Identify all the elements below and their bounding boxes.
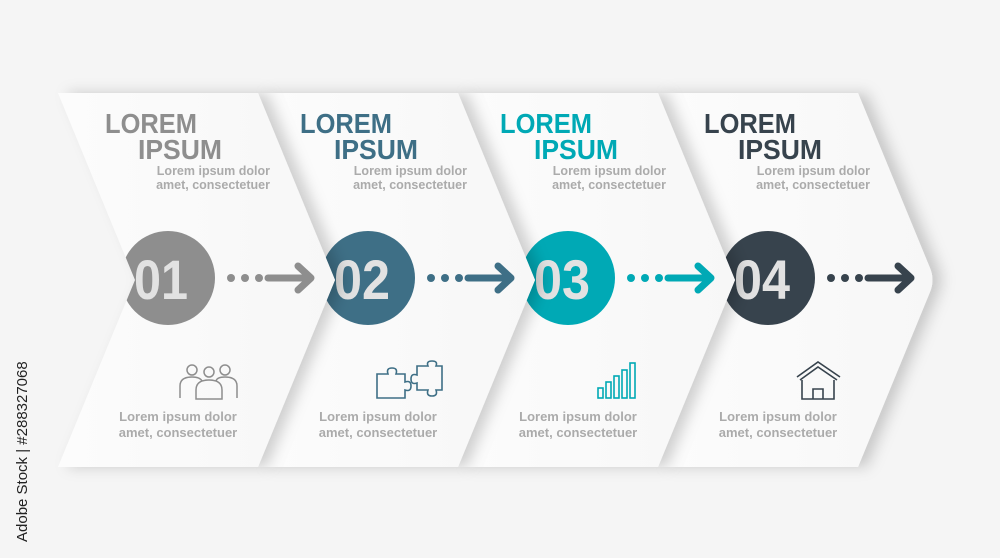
bottom text blocks	[119, 409, 837, 440]
circle 02: 02	[334, 248, 390, 311]
circle 04	[721, 231, 815, 325]
chevron 4	[658, 93, 932, 467]
chevron 1	[58, 93, 335, 467]
bottom text blocks: Lorem ipsum dolor	[719, 409, 837, 424]
top text blocks: Lorem ipsum dolor	[757, 164, 870, 178]
title 1: IPSUM	[138, 134, 222, 165]
circle 04: 04	[734, 248, 790, 311]
top text blocks: amet, consectetuer	[756, 178, 870, 192]
icon: house	[797, 362, 840, 399]
top text blocks: amet, consectetuer	[552, 178, 666, 192]
title 3	[500, 108, 618, 165]
bottom text blocks: Lorem ipsum dolor	[319, 409, 437, 424]
bottom text blocks: Lorem ipsum dolor	[519, 409, 637, 424]
title 2: IPSUM	[334, 134, 418, 165]
chevron 3	[458, 93, 735, 467]
title 4: LOREM	[704, 108, 796, 139]
circle 01: 01	[134, 248, 188, 311]
circle 02	[321, 231, 415, 325]
circle 03: 03	[534, 248, 590, 311]
bottom text blocks: amet, consectetuer	[119, 425, 237, 440]
icon: people	[180, 365, 237, 399]
circle 01	[121, 231, 215, 325]
bottom text blocks: amet, consectetuer	[319, 425, 437, 440]
top text blocks: Lorem ipsum dolor	[553, 164, 666, 178]
title 1: LOREM	[105, 108, 197, 139]
bottom text blocks: amet, consectetuer	[719, 425, 837, 440]
title 4	[704, 108, 822, 165]
top text blocks: amet, consectetuer	[353, 178, 467, 192]
title 3: IPSUM	[534, 134, 618, 165]
top text blocks: Lorem ipsum dolor	[354, 164, 467, 178]
title 2	[300, 108, 418, 165]
title 4: IPSUM	[738, 134, 822, 165]
bottom text blocks: amet, consectetuer	[519, 425, 637, 440]
icon: puzzle	[377, 361, 442, 398]
title 3: LOREM	[500, 108, 592, 139]
top text blocks	[156, 164, 870, 192]
title 1	[105, 108, 222, 165]
title 2: LOREM	[300, 108, 392, 139]
icon: bar chart	[598, 363, 635, 398]
bottom text blocks: Lorem ipsum dolor	[119, 409, 237, 424]
side watermark text: Adobe Stock | #288327068	[14, 361, 31, 542]
arrow 2	[427, 266, 511, 290]
top text blocks: Lorem ipsum dolor	[157, 164, 270, 178]
circle 03	[521, 231, 615, 325]
chevron 2	[258, 93, 535, 467]
arrow 3	[627, 266, 711, 290]
arrow 4	[827, 266, 911, 290]
top text blocks: amet, consectetuer	[156, 178, 270, 192]
arrow 1	[227, 266, 311, 290]
